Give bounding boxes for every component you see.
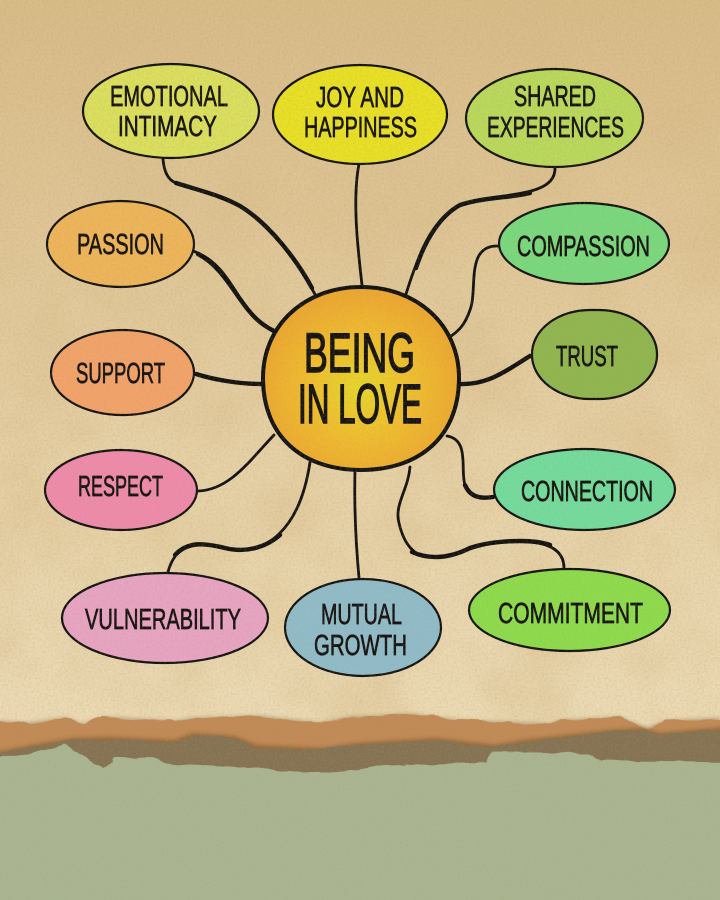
node: mutual growth: MUTUAL [321,599,402,631]
node: shared experiences [466,69,643,167]
node: commitment: COMMITMENT [498,598,643,630]
node: emotional intimacy [83,64,259,158]
central node: being in love [263,287,459,470]
node: connection [494,449,675,530]
node: support: SUPPORT [76,358,165,390]
node: support [51,330,194,415]
node: trust [532,310,657,399]
node: mutual growth [285,579,441,676]
node: mutual growth: GROWTH [314,630,407,662]
node: passion: PASSION [77,229,164,261]
node: emotional intimacy: EMOTIONAL [110,81,228,113]
node: shared experiences: EXPERIENCES [487,112,624,144]
node: shared experiences: SHARED [514,81,596,113]
node: joy and happiness: JOY AND [316,82,404,114]
central node: being in love: IN LOVE [298,372,422,435]
central node: being in love: BEING [304,321,415,384]
node: joy and happiness: HAPPINESS [304,112,417,144]
connector lines [163,159,564,578]
node: vulnerability [62,573,268,663]
node: connection: CONNECTION [521,476,653,508]
node: respect [45,450,197,530]
node: respect: RESPECT [78,471,163,503]
node: vulnerability: VULNERABILITY [85,604,241,636]
node: joy and happiness [273,65,447,164]
torn paper layers [0,714,720,900]
node: commitment [469,569,670,651]
node: emotional intimacy: INTIMACY [118,111,217,143]
node: compassion: COMPASSION [517,231,650,263]
node: passion [47,201,194,287]
node: compassion [499,203,669,284]
node: trust: TRUST [556,341,618,373]
